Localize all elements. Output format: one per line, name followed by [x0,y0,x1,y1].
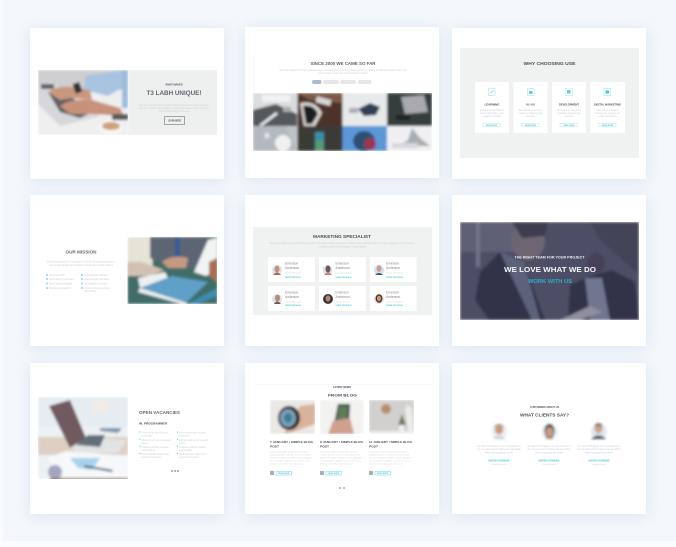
service card: learning [475,82,509,133]
team member card 1: Anderson [285,266,299,270]
blog post 2: POST [320,444,329,448]
blog photo: phone in hand [320,400,364,434]
service card: ui ux: UI / UX [526,104,535,106]
hero text panel: give our customers the confidence and trust necessary to grow their own [140,107,209,110]
blog post 3: sadipscing elitr, sed diam nonumy eirmod [369,454,410,456]
testimonial 2: their top grading work [535,452,564,454]
blog pagination dots [339,487,345,489]
team member card 2: Emerson [336,262,349,266]
hero photo: hands on laptop [38,70,128,135]
blog post 2 [320,400,364,475]
team description: social and social media, campaigns in social media [318,246,366,248]
team member card 6 [370,286,416,311]
mission checklist: Work Analysis of Information [49,278,75,281]
hero text panel: T3 LABH UNIQUE! [146,90,202,97]
blog post 3: READ MORE [377,472,389,475]
testimonial 3: the new school and to explore and dependable [578,448,621,451]
vacancies list: Incididunt ut labore et dolore [142,446,169,449]
panel: hero section [30,28,224,181]
testimonial 3: their top grading work [585,452,614,454]
vacancies list: Adipiscing elit, sed do eiusmod [142,439,171,442]
testimonials eyebrow: CUSTOMERS ABOUT US [530,406,559,409]
testimonial 1 [478,424,521,466]
team member card 1: Emerson [285,262,298,266]
team member card 3 [370,257,416,282]
blog post 2: invidunt ut labore et dolore magna aliquyam [320,456,362,460]
blog post 3: erat sed diam voluptua at vero eos et ac [369,460,411,462]
team member card 2: Anderson [336,266,350,270]
hero text panel: We are T3 group formed to deliver the finest design and expert solutions [140,104,209,107]
mission checklist: Work Survey 2017 [49,274,66,277]
vacancies list: consectetur [142,434,153,438]
panel: call to action section [452,195,646,348]
team member card 4: VIEW PROFILE [285,305,302,307]
testimonial 2: We have T3 full support in our own opinions. In [528,445,571,448]
gallery photo grid [253,93,432,151]
service card: digital marketing: Solutions for marketing [596,109,619,112]
vacancies list: magna aliqua [179,450,193,452]
blog post 1: READ MORE [278,472,290,475]
blog post 3: POST [369,444,378,448]
team member card 5: Emerson [336,290,349,294]
service card: development: services [564,115,574,118]
gallery filter pills [312,80,372,84]
testimonial 3: We have T3 full support in our own opinions. In [578,445,621,448]
service card: digital marketing: DIGITAL MARKETING [594,104,621,106]
blog post 3: dolores et ea rebum stet clita kasd [369,462,403,466]
team description [270,242,415,248]
team member card 3: Senior Consultant [386,272,403,274]
hero text panel [128,70,217,135]
vacancies photo: laptop on desk [38,397,128,480]
blog post 2: Lorem ipsum dolor sit amet elit consetetur [320,450,358,454]
team member card 6: VIEW PROFILE [386,305,404,307]
vacancies list: tempor [179,442,186,445]
team description: Manage campaigns single month Examples such as Facebook, Twitter, LinkedIn and Instagram. Work with the designer to create engaging content for various [270,242,415,245]
mission checklist: Complete & Delivery & Strong [84,287,111,290]
testimonial 2: the new school and to explore and dependable [528,448,571,451]
team member card 4: Senior Manager [285,300,301,304]
mission checklist [46,274,111,293]
team member card 6: Anderson [386,295,400,299]
service card: digital marketing [590,82,625,133]
blog post 1: 7 JANUARY / SIMPLE BLOG [270,440,314,444]
gallery description: start in order to meet the growing platform culture [318,72,369,75]
blog post 2: 8 JANUARY / SIMPLE BLOG [320,440,364,444]
gallery heading: SINCE 2000 WE CAME SO FAR [310,61,376,67]
service card: learning: Designed specifically for [480,109,504,112]
vacancies list: Lorem ipsum dolor sit amet, [179,432,206,434]
mission description: meet on and use the best we always put those the possible solutions [49,264,114,267]
blog post 2: sadipscing elitr, sed diam nonumy eirmod [320,454,361,456]
service card: digital marketing: other products [598,115,618,118]
hero text panel: WHAT MAKES [166,82,183,86]
service card: development [552,82,586,133]
service card: development: READ MORE [564,124,575,127]
vacancies list: magna aliqua [142,450,155,452]
team member card 3: VIEW PROFILE [386,277,404,279]
cta text: WORK WITH US [528,279,572,285]
vacancies list: consectetur [179,434,190,438]
blog post 1: dolores et ea rebum stet clita kasd [270,462,304,466]
blog post 3: Lorem ipsum dolor sit amet elit consetetur [369,450,407,454]
blog post 1: Lorem ipsum dolor sit amet elit consetetur [270,450,308,454]
blog post 2: dolores et ea rebum stet clita kasd [320,462,354,466]
vacancies list: Nunc pulvinar sapien sed [142,453,169,456]
testimonial 1: We have T3 full support in our own opinions. In [478,445,521,448]
team member card 3: Anderson [386,266,400,270]
panel: open vacancies section [30,363,224,516]
service card: digital marketing: covering proper campaigns and [595,112,621,115]
vacancies list: Incididunt ut labore et dolore [179,446,207,449]
team member card 1: VIEW PROFILE [285,277,302,279]
mission checklist: Work Customer Analysis [49,282,73,286]
panel: gallery section [245,27,439,180]
testimonial 1: the new school and to explore and dependable [478,448,521,451]
blog eyebrow: LATEST NEWS [333,386,351,389]
service card: development: providing great design [557,112,582,115]
vacancies heading: OPEN VACANCIES [139,410,180,415]
service card: digital marketing: READ MORE [602,124,614,127]
team member card 3: Emerson [386,262,399,266]
blog post 3: 11 JANUARY / SIMPLE BLOG [369,440,413,444]
service card: development: DEVELOPMENT [559,104,579,106]
service card: ui ux: READ MORE [525,124,537,127]
blog post 3 [369,400,414,475]
testimonial 1: MARISA HAWKINS [488,460,510,462]
blog photo: clock and plant on shelf [369,400,414,434]
vacancies list: Nunc pulvinar sapien sed [179,453,207,456]
vacancies list: Lorem ipsum dolor sit amet, [142,432,169,434]
vacancies pagination dots [171,470,179,472]
team member card 2: Consultant, Adviser [336,272,353,274]
service card: learning: READ MORE [486,124,498,127]
panel: marketing specialist section [245,195,439,348]
mission description: We have been awarded for our quality, the ultimate we always help ensure to [47,260,116,264]
service card: ui ux: components, that bring great [518,112,543,115]
mission checklist: Comprehensive Solution [84,274,109,277]
testimonial 1: their top grading work [485,452,514,454]
service card: ui ux: Streamline simple [518,109,543,112]
team member card 2 [319,257,366,282]
hero text panel: and digital brands success [158,110,190,113]
vacancies list: euismod elementum [179,456,199,459]
blog post 1 [270,400,315,475]
cta text: THE RIGHT TEAM FOR YOUR PROJECT [514,256,584,260]
team member card 1: Senior Manager [285,272,301,274]
service card: development: Best suited for companies [557,109,582,112]
testimonial 1: Creative Director [492,463,507,466]
cta text: WE LOVE WHAT WE DO [504,265,596,274]
mission checklist: Materials Design and Sales [84,278,110,281]
blog heading: FROM BLOG [328,392,357,398]
mission heading: OUR MISSION [66,250,96,254]
team member card 4 [268,286,315,311]
blog post 2: erat sed diam voluptua at vero eos et ac [320,460,362,462]
team member card 5: VIEW PROFILE [336,305,352,307]
mission checklist: Site Visualize and Audits [84,282,108,286]
testimonial 2: MARISA HAWKINS [538,460,560,462]
panel: why choosing us section [452,28,646,181]
mission description [47,260,116,267]
team member card 4: Emerson [285,290,298,294]
mission checklist: Work Design & Selection [49,287,72,290]
vacancies list: euismod elementum [142,456,162,459]
cta photo: businessmen with dark overlay [460,222,639,320]
team member card 5 [319,286,366,311]
vacancies subheading: IN. PROGRAMMER [139,422,168,426]
team member card 6: Emerson [386,290,399,294]
blog post 3: invidunt ut labore et dolore magna aliquyam [369,456,411,460]
service card: ui ux [514,82,548,133]
panel: testimonials section [452,363,646,516]
panel: blog section [245,363,439,516]
testimonial 3 [578,423,621,466]
gallery description: We have always built the innovative ideas contemplating, learning, developing and creating an efficient solution since our [280,69,407,72]
vacancies list: Adipiscing elit, sed do eiusmod [179,439,209,442]
blog post 1: invidunt ut labore et dolore magna aliquyam [270,456,312,460]
service card: ui ux: activity [526,115,536,118]
testimonial 3: Creative Director [592,463,607,466]
blog post 2: READ MORE [328,472,340,475]
service card: learning: LEARNING [484,104,500,106]
blog photo: camera lens [270,400,315,434]
vacancies list: tempor [142,442,149,445]
team member card 2: VIEW PROFILE [336,277,352,279]
team member card 1 [268,257,315,282]
gallery description [280,69,407,75]
testimonial 3: MARISA HAWKINS [588,460,610,462]
testimonials heading: WHAT CLIENTS SAY? [520,412,569,418]
blog post 1: erat sed diam voluptua at vero eos et ac [270,460,312,462]
service card: learning: custom applications, learn [480,112,505,115]
blog post 1: sadipscing elitr, sed diam nonumy eirmod [270,454,311,456]
hero button: LEARN MORE [168,120,181,122]
cta text [504,256,596,285]
service card: learning: program activities [483,115,502,118]
blog post 1: POST [270,444,279,448]
team member card 4: Anderson [285,295,299,299]
team heading: MARKETING SPECIALIST [313,234,371,240]
why choosing heading: WHY CHOOSING USE [524,61,576,67]
mission photo: business meeting [127,237,218,305]
team member card 5: Senior Partner [336,300,351,304]
testimonial 2: Creative Director [542,463,557,466]
vacancies list [139,432,209,459]
panel: our mission section [30,195,224,348]
testimonial 2 [528,424,571,466]
team member card 5: Anderson [336,295,350,299]
mission checklist: High in More [84,290,97,293]
team member card 6: Senior Designer [386,300,403,304]
